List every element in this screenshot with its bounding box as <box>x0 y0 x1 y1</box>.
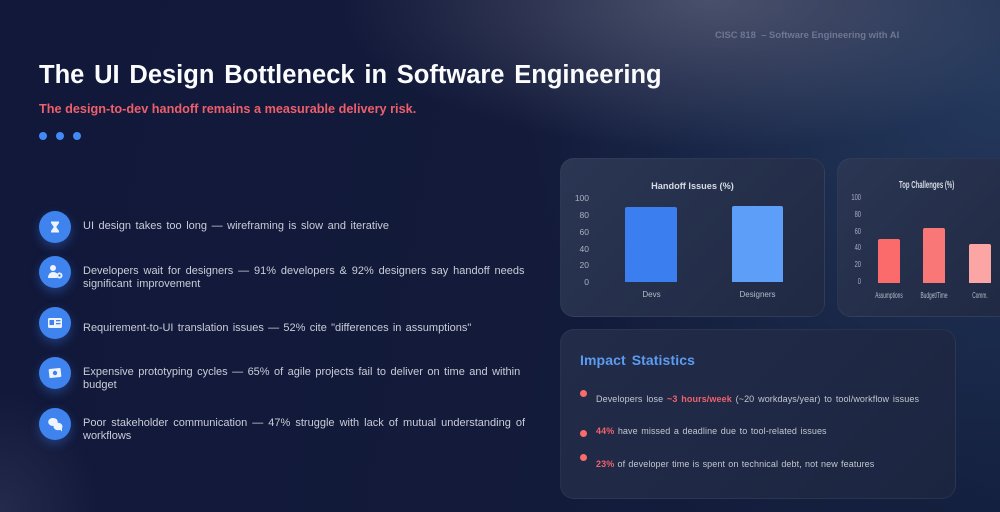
y axis labels: 20 <box>855 260 861 269</box>
panel: handoff issues chart <box>560 158 825 317</box>
text: Poor stakeholder communication <box>83 416 526 442</box>
stat 1: Developers lose ~3 hours/week (~20 workdays/year) to tool/workflow issues <box>596 394 919 404</box>
y axis labels <box>851 193 861 286</box>
stat 3: 23% of developer time is spent on technical debt, not new features <box>596 459 874 469</box>
chart title: Handoff Issues (%) <box>651 181 734 191</box>
stat 2: 44% have missed a deadline due to tool-related issues <box>596 426 827 436</box>
text: Poor stakeholder communication: workflows <box>83 430 131 442</box>
label: Budget/Time: Budget/Time <box>920 291 948 300</box>
chart title: Top Challenges (%) <box>899 180 954 191</box>
bar: Devs <box>625 207 677 282</box>
icon: user clock <box>39 256 71 288</box>
label: Comm.: Comm. <box>972 291 988 300</box>
panel: impact statistics <box>560 329 956 499</box>
bullet 2 <box>580 430 587 437</box>
course label: CISC 818 – Software Engineering with AI <box>715 30 899 41</box>
bar: Budget/Time <box>923 228 945 283</box>
text: Expensive prototyping cycles: budget <box>83 378 117 390</box>
label: Devs: Devs <box>642 290 661 299</box>
icon: id card <box>39 307 71 339</box>
subtitle: The design-to-dev handoff remains a measurable delivery risk. <box>39 102 416 116</box>
y axis labels: 80 <box>580 210 589 220</box>
text: Poor stakeholder communication: Poor stakeholder communication — 47% struggle with lack of mutual understanding of <box>83 416 525 428</box>
heading: impact statistics: Impact Statistics <box>580 352 695 368</box>
bullet 1 <box>580 390 587 397</box>
text: Developers wait for designers: Developers wait for designers — 91% developers & 92% designers say handoff needs <box>83 264 524 276</box>
icon: chat bubbles <box>39 408 71 440</box>
bar: Comm. <box>969 244 991 283</box>
panel: top challenges chart <box>837 158 1000 317</box>
y axis labels: 40 <box>855 243 861 252</box>
y axis labels: 0 <box>584 277 589 287</box>
bullet 3 <box>580 454 587 461</box>
y axis labels: 0 <box>858 277 861 286</box>
y axis labels: 40 <box>580 244 589 254</box>
y axis labels: 20 <box>580 260 589 270</box>
bar: Designers <box>732 206 783 282</box>
text: Requirement-to-UI translation issues: Requirement-to-UI translation issues — 52% cite "differences in assumptions" <box>83 322 471 334</box>
y axis labels: 100 <box>851 193 861 202</box>
text: Developers wait for designers <box>83 264 524 290</box>
text: Developers wait for designers: significant improvement <box>83 278 200 290</box>
text: Expensive prototyping cycles <box>83 366 520 390</box>
icon: money bill <box>39 357 71 389</box>
y axis labels <box>575 193 589 287</box>
label: Designers: Designers <box>739 290 776 299</box>
text: Expensive prototyping cycles: Expensive prototyping cycles — 65% of agile projects fail to deliver on time and within <box>83 366 520 378</box>
y axis labels: 60 <box>580 227 589 237</box>
icon: hourglass <box>39 211 71 243</box>
title: The UI Design Bottleneck in Software Engineering <box>39 61 662 89</box>
decorative dots row <box>39 132 81 140</box>
bar: Assumptions <box>878 239 900 283</box>
y axis labels: 60 <box>855 227 861 236</box>
label: Assumptions: Assumptions <box>875 291 903 300</box>
text: UI design takes too long: UI design takes too long — wireframing is slow and iterative <box>83 220 389 232</box>
y axis labels: 100 <box>575 193 589 203</box>
y axis labels: 80 <box>855 210 861 219</box>
